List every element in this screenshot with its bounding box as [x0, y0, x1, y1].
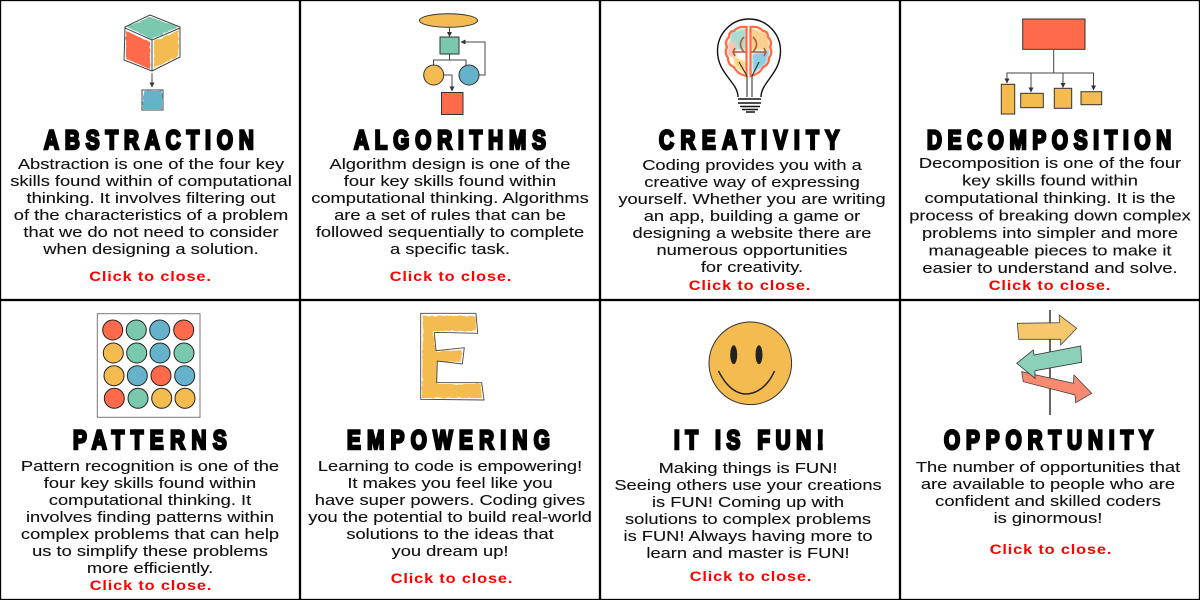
text: decomposition: computational thinking. It is the: [924, 190, 1176, 207]
text: algorithms: computational thinking. Algorithms: [311, 190, 589, 207]
text: opportunity: The number of opportunities that: [916, 459, 1181, 476]
text: abstraction: Abstraction is one of the four key: [18, 156, 285, 173]
heading: decomposition: DECOMPOSITION: [927, 126, 1171, 156]
text: it is fun: is FUN! Coming up with: [652, 494, 844, 511]
link: close: Click to close.: [689, 278, 811, 294]
text: empowering: you dream up!: [392, 543, 508, 560]
panel: it is fun: [600, 300, 900, 600]
text: creativity: designing a website there are: [633, 225, 871, 242]
text: creativity: an app, building a game or: [644, 208, 861, 225]
panel: decomposition: [900, 0, 1200, 300]
text: empowering: solutions to the ideas that: [346, 526, 554, 543]
icon: light bulb brain: [718, 19, 780, 112]
text: patterns: involves finding patterns within: [26, 509, 274, 526]
link: close: Click to close.: [990, 542, 1112, 558]
icon: dot pattern grid: [97, 314, 200, 417]
heading: opportunity: OPPORTUNITY: [944, 426, 1153, 456]
text: empowering: you the potential to build real-world: [308, 509, 592, 526]
text: abstraction: when designing a solution.: [42, 241, 259, 258]
panel: abstraction: [0, 0, 300, 300]
text: decomposition: key skills found within: [962, 172, 1138, 189]
panel: opportunity: [900, 300, 1200, 600]
text: patterns: four key skills found within: [44, 475, 256, 492]
text: creativity: yourself. Whether you are writing: [618, 191, 886, 208]
text: patterns: complex problems that can help: [21, 526, 279, 543]
text: algorithms: a specific task.: [390, 241, 510, 258]
text: decomposition: easier to understand and solve.: [922, 260, 1178, 277]
heading: it is fun: IT IS FUN!: [674, 426, 824, 456]
icon: flowchart: [420, 14, 485, 115]
link: close: Click to close.: [390, 269, 512, 285]
text: empowering: Learning to code is empowering!: [318, 458, 582, 475]
text: opportunity: confident and skilled coders: [935, 493, 1161, 510]
text: decomposition: manageable pieces to make it: [929, 242, 1172, 259]
text: opportunity: is ginormous!: [994, 510, 1102, 527]
heading: empowering: EMPOWERING: [347, 426, 550, 456]
heading: patterns: PATTERNS: [73, 426, 227, 456]
text: empowering: It makes you feel like you: [347, 475, 553, 492]
text: creativity: numerous opportunities: [656, 242, 848, 259]
text: opportunity: are available to people who are: [921, 476, 1175, 493]
icon: decomposition tree: [1001, 19, 1102, 114]
text: creativity: for creativity.: [701, 259, 803, 276]
text: it is fun: is FUN! Always having more to: [624, 528, 872, 545]
link: close: Click to close.: [690, 569, 812, 585]
text: algorithms: are a set of rules that can be: [334, 207, 566, 224]
panel: empowering: [300, 300, 600, 600]
text: decomposition: process of breaking down complex: [909, 207, 1191, 224]
icon: smiley face: [709, 322, 792, 405]
text: creativity: creative way of expressing: [644, 174, 860, 191]
text: it is fun: Seeing others use your creations: [614, 477, 882, 494]
text: empowering: have super powers. Coding gives: [315, 492, 585, 509]
heading: creativity: CREATIVITY: [659, 126, 839, 156]
text: decomposition: Decomposition is one of the four: [919, 155, 1182, 172]
text: algorithms: Algorithm design is one of the: [330, 156, 570, 173]
text: abstraction: thinking. It involves filtering out: [26, 190, 276, 207]
text: patterns: more efficiently.: [87, 560, 213, 577]
icon: signpost arrows: [1017, 310, 1092, 415]
panel: algorithms: [300, 0, 600, 300]
heading: algorithms: ALGORITHMS: [354, 126, 546, 156]
text: it is fun: learn and master is FUN!: [646, 545, 850, 562]
panel: patterns: [0, 300, 300, 600]
panel: creativity: [600, 0, 900, 300]
text: algorithms: four key skills found within: [344, 173, 556, 190]
heading: abstraction: ABSTRACTION: [44, 126, 254, 156]
text: patterns: Pattern recognition is one of the: [21, 458, 279, 475]
text: algorithms: followed sequentially to complete: [316, 224, 584, 241]
text: abstraction: skills found within of computational: [10, 173, 292, 190]
text: it is fun: Making things is FUN!: [659, 460, 837, 477]
text: it is fun: solutions to complex problems: [625, 511, 871, 528]
link: close: Click to close.: [90, 578, 212, 594]
text: decomposition: problems into simpler and more: [922, 225, 1178, 242]
link: close: Click to close.: [989, 278, 1111, 294]
icon: cube: [124, 15, 180, 110]
text: patterns: us to simplify these problems: [32, 543, 268, 560]
link: close: Click to close.: [391, 571, 513, 587]
text: abstraction: of the characteristics of a problem: [14, 207, 288, 224]
icon: letter E: [421, 313, 484, 400]
link: close: Click to close.: [89, 269, 212, 285]
text: abstraction: that we do not need to consider: [23, 224, 279, 241]
text: creativity: Coding provides you with a: [642, 157, 863, 174]
text: patterns: computational thinking. It: [49, 492, 252, 509]
